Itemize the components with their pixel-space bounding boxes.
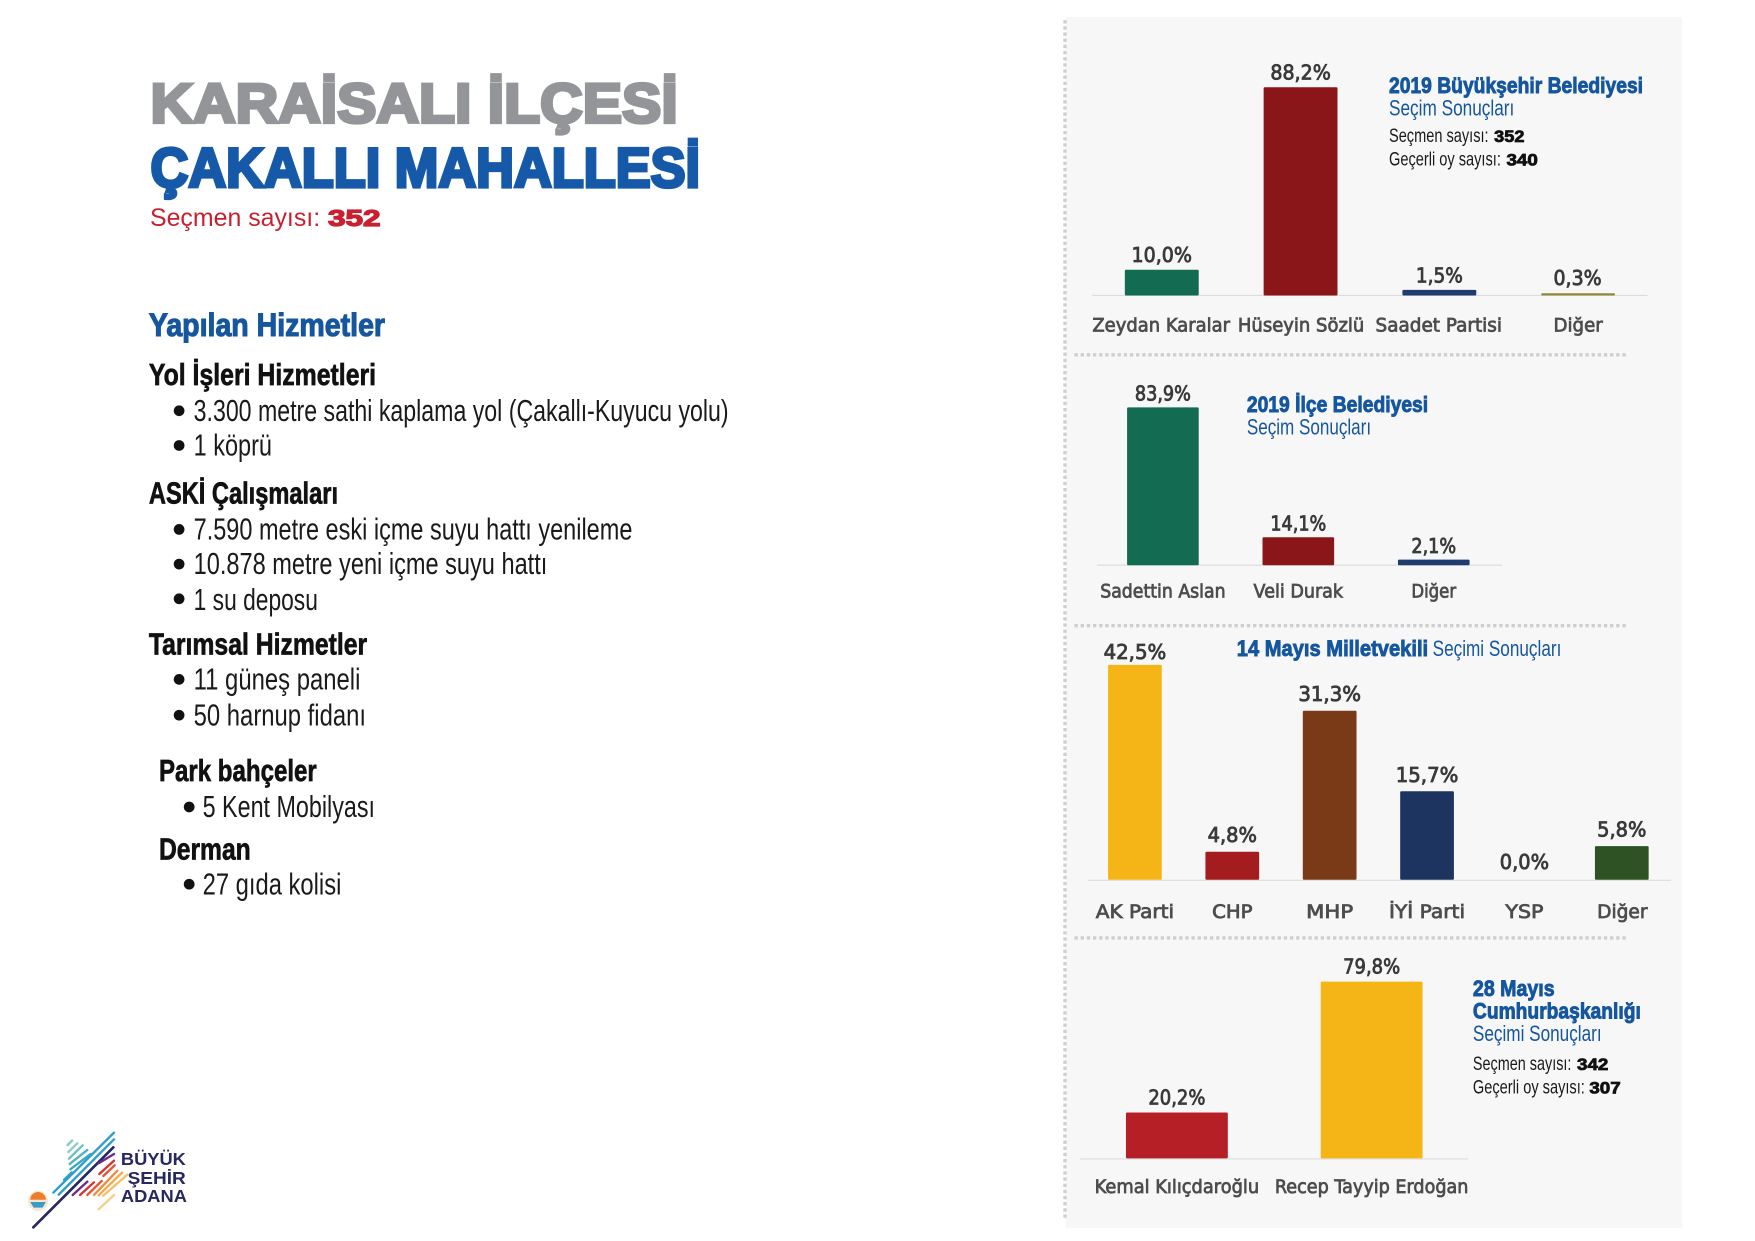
labels: Veli Durak [1254,581,1343,603]
values: 1,5% [1416,264,1463,288]
values: 20,2% [1148,1086,1205,1110]
labels: Sadettin Aslan [1100,581,1226,603]
values: 5,8% [1597,818,1646,842]
bars [1127,407,1470,565]
heading: Seçmen sayısı: [1473,1053,1571,1075]
values: 31,3% [1298,682,1361,706]
heading: Seçimi Sonuçları [1433,636,1561,661]
labels: Saadet Partisi [1376,314,1502,336]
heading: Geçerli oy sayısı: [1389,149,1501,171]
chart: 28 May presidential [1080,955,1641,1198]
voter count: Seçmen sayısı: [150,205,320,232]
heading [1247,392,1428,439]
values [1148,955,1400,1110]
heading: Seçmen sayısı: [1389,125,1489,147]
group: relief: 27 gıda kolisi [203,868,341,901]
group: parks [159,755,375,824]
labels: CHP [1212,901,1252,923]
values: 0,0% [1500,850,1549,874]
labels: YSP [1504,901,1543,923]
labels: MHP [1306,901,1353,923]
heading: Geçerli oy sayısı: [1473,1076,1585,1098]
values: 0,3% [1554,266,1602,290]
heading: Seçim Sonuçları [1247,414,1371,439]
group: water works: 10.878 metre yeni içme suyu hattı [194,548,547,581]
group: agricultural services: 50 harnup fidanı [194,699,366,732]
values: 88,2% [1270,60,1331,84]
group: agricultural services [149,629,367,732]
group: road works: Yol İşleri Hizmetleri [149,359,376,392]
heading: 28 Mayıs [1473,976,1555,1001]
heading: Seçim Sonuçları [1389,95,1514,120]
values: 15,7% [1396,763,1458,787]
heading: 2019 İlçe Belediyesi [1247,392,1428,417]
heading: 2019 Büyükşehir Belediyesi [1389,73,1643,98]
logo: Büyükşehir Adana: ADANA [121,1186,187,1206]
labels: İYİ Parti [1389,900,1465,923]
labels [1095,1176,1468,1198]
labels: Kemal Kılıçdaroğlu [1095,1176,1259,1198]
group: agricultural services: 11 güneş paneli [194,663,360,696]
group: road works [149,359,729,463]
labels: Zeydan Karalar [1092,314,1230,336]
chart: 14 May parliamentary [1088,636,1671,923]
group: road works: 1 köprü [194,430,272,463]
heading [1473,976,1641,1098]
bars [1108,665,1649,880]
values: 10,0% [1132,243,1192,267]
values: 14,1% [1270,512,1326,536]
group: water works: ASKİ Çalışmaları [149,478,338,511]
labels: Hüseyin Sözlü [1238,314,1364,336]
title: district and neighbourhood: ÇAKALLI MAHALLESİ [151,136,700,199]
labels: Diğer [1597,901,1648,923]
values: 2,1% [1411,534,1456,558]
labels: AK Parti [1096,901,1174,923]
title: district and neighbourhood: KARAİSALI İLÇESİ [151,72,678,135]
group: relief [159,834,341,901]
values [1104,640,1646,874]
logo: Büyükşehir Adana: BÜYÜK [121,1149,186,1169]
services list [149,307,729,901]
values: 4,8% [1208,823,1257,847]
heading: 307 [1589,1078,1621,1097]
title: district and neighbourhood [151,72,700,199]
group: agricultural services: Tarımsal Hizmetler [149,629,367,662]
heading: 14 Mayıs Milletvekili [1237,636,1428,661]
chart: 2019 metropolitan [1092,60,1648,336]
logo: Büyükşehir Adana [28,1133,187,1227]
heading: 342 [1577,1055,1608,1074]
heading: 352 [1494,127,1524,146]
panel: election results [1065,17,1682,1228]
heading [1237,636,1561,661]
group: water works: 7.590 metre eski içme suyu hattı yenileme [194,513,632,546]
heading: 340 [1507,151,1538,170]
values: 83,9% [1135,382,1191,406]
emblem [28,1191,48,1211]
heading [1389,73,1643,171]
labels [1092,314,1603,336]
values: 79,8% [1343,955,1400,979]
group: parks: 5 Kent Mobilyası [203,791,375,824]
group: parks: Park bahçeler [159,755,317,788]
bars [1125,87,1615,295]
labels [1096,900,1648,923]
labels: Diğer [1411,581,1456,603]
group: road works: 3.300 metre sathi kaplama yol (Çakallı-Kuyucu yolu) [194,395,729,428]
values [1135,382,1456,558]
chart: 2019 district [1097,382,1502,603]
labels: Diğer [1554,314,1603,336]
heading: Cumhurbaşkanlığı [1473,998,1641,1023]
labels: Recep Tayyip Erdoğan [1275,1176,1468,1198]
bars [1126,982,1423,1158]
logo: Büyükşehir Adana: ŞEHİR [128,1168,186,1188]
labels [1100,581,1456,603]
voter count: 352 [328,205,381,231]
services heading: Yapılan Hizmetler [149,307,385,343]
group: water works: 1 su deposu [194,584,318,617]
values: 42,5% [1104,640,1166,664]
group: water works [149,478,632,617]
values [1132,60,1602,290]
group: relief: Derman [159,834,251,867]
heading: Seçimi Sonuçları [1473,1021,1602,1046]
